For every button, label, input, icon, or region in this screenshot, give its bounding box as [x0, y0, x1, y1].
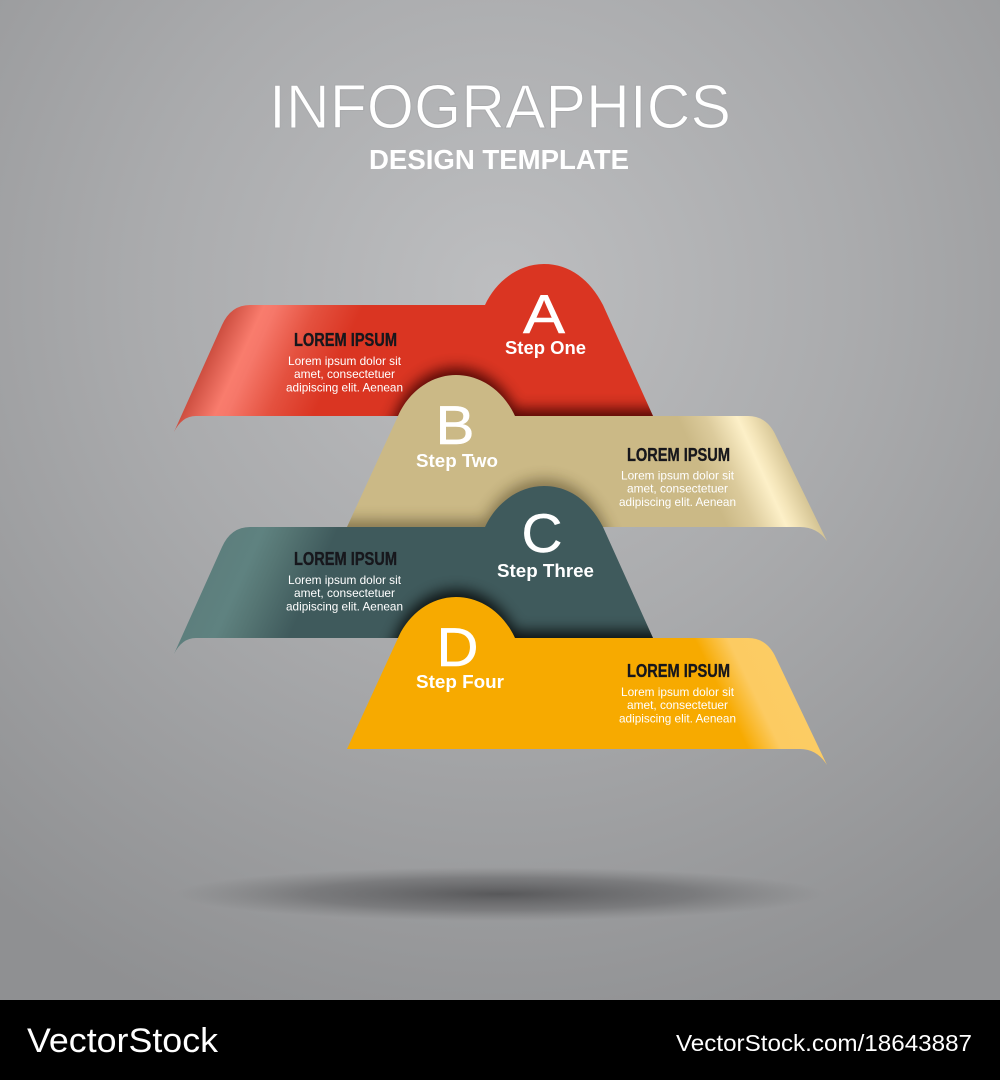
- body text: [619, 468, 736, 509]
- footer bar: VectorStock.com/18643887: [676, 1030, 972, 1056]
- step three label: Step Three: [497, 561, 594, 581]
- body text: [619, 685, 736, 726]
- panel: step three (teal): [174, 486, 653, 654]
- footer bar: VectorStock: [27, 1022, 219, 1060]
- footer bar: [0, 1000, 1000, 1080]
- body text: amet, consectetuer: [294, 367, 395, 381]
- floating ground shadow: [175, 867, 825, 921]
- panel: step four (orange): [347, 597, 827, 765]
- step four label: Step Four: [416, 672, 504, 692]
- body text: Lorem ipsum dolor sit: [288, 573, 402, 587]
- step two label: Step Two: [416, 451, 498, 471]
- letter A: A: [523, 283, 565, 345]
- body text: amet, consectetuer: [294, 586, 395, 600]
- shadow cast by step three: [347, 471, 615, 527]
- shadow cast by step two: [382, 357, 653, 416]
- heading: lorem ipsum: LOREM IPSUM: [627, 445, 730, 465]
- body text: amet, consectetuer: [627, 698, 728, 712]
- letter D: D: [436, 616, 478, 678]
- body text: [286, 354, 403, 394]
- shadow cast by step four: [386, 582, 653, 638]
- body text: Lorem ipsum dolor sit: [288, 354, 402, 368]
- title: INFOGRAPHICS: [269, 73, 731, 142]
- title: DESIGN TEMPLATE: [369, 144, 629, 175]
- step one label: Step One: [505, 338, 586, 358]
- letter B: B: [436, 394, 474, 456]
- body text: Lorem ipsum dolor sit: [621, 685, 735, 699]
- letter C: C: [522, 502, 562, 564]
- heading: lorem ipsum: LOREM IPSUM: [294, 330, 397, 350]
- title: [269, 73, 731, 175]
- body text: adipiscing elit. Aenean: [619, 712, 736, 726]
- body text: [286, 573, 403, 614]
- body text: adipiscing elit. Aenean: [286, 600, 403, 614]
- heading: lorem ipsum: LOREM IPSUM: [627, 661, 730, 681]
- body text: Lorem ipsum dolor sit: [621, 468, 735, 482]
- body text: adipiscing elit. Aenean: [286, 380, 403, 394]
- body text: amet, consectetuer: [627, 482, 728, 496]
- panel: step two (beige): [347, 375, 827, 540]
- body text: adipiscing elit. Aenean: [619, 495, 736, 509]
- heading: lorem ipsum: LOREM IPSUM: [294, 549, 397, 569]
- panel: step one (red): [174, 264, 653, 432]
